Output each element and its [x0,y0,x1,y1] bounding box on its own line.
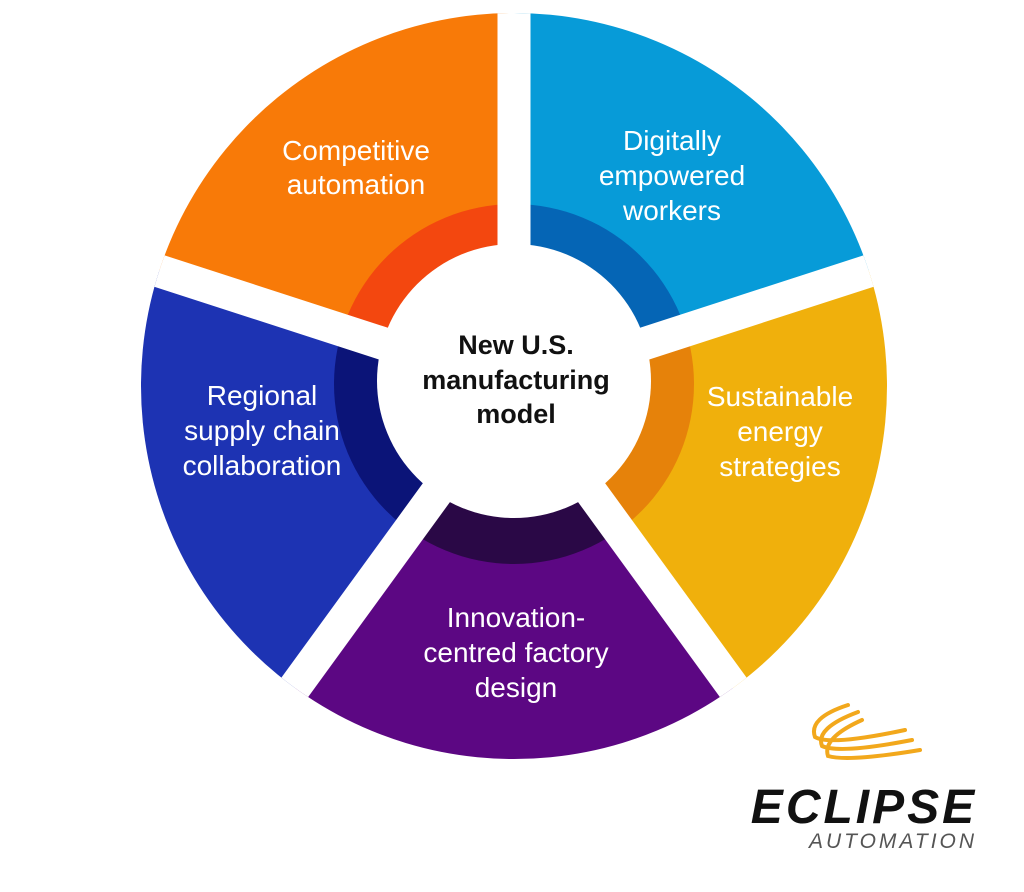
segment: innovation-centred factory design [295,539,733,759]
center text [422,330,610,429]
segment: sustainable energy strategies [632,270,887,688]
label: regional supply chain collaboration [183,380,341,481]
label: digitally empowered workers: empowered [599,160,745,191]
infographic wheel [141,13,976,848]
label: competitive automation: Competitive [282,135,430,166]
label: sustainable energy strategies: strategies [719,451,841,482]
logo: eclipse automation: ECLIPSE [751,781,977,834]
segment: digitally empowered workers [514,13,869,315]
icon: eclipse swooshes [814,705,920,758]
center circle [377,244,651,518]
logo: eclipse automation [751,705,977,853]
segment: competitive automation [159,13,508,315]
label: innovation-centred factory design: centred factory [423,637,609,668]
center text: New U.S. [458,330,574,360]
wheel [141,13,887,759]
label: sustainable energy strategies: Sustainable [707,381,853,412]
label: digitally empowered workers: workers [622,195,721,226]
label: sustainable energy strategies: energy [737,416,823,447]
inner ring [334,204,694,564]
label: competitive automation [282,135,430,200]
center text: model [476,399,556,429]
label: regional supply chain collaboration: Regional [207,380,317,411]
label: digitally empowered workers: Digitally [623,125,721,156]
center text: manufacturing [422,365,610,395]
label: innovation-centred factory design [423,602,609,703]
segment: regional supply chain collaboration [141,270,396,688]
label: regional supply chain collaboration: collaboration [183,450,341,481]
label: sustainable energy strategies [707,381,853,482]
label: regional supply chain collaboration: supply chain [184,415,340,446]
label: digitally empowered workers [599,125,745,226]
label: competitive automation: automation [287,169,425,200]
label: innovation-centred factory design: design [475,672,557,703]
label: innovation-centred factory design: Innovation- [447,602,585,633]
logo: eclipse automation: AUTOMATION [807,830,977,853]
